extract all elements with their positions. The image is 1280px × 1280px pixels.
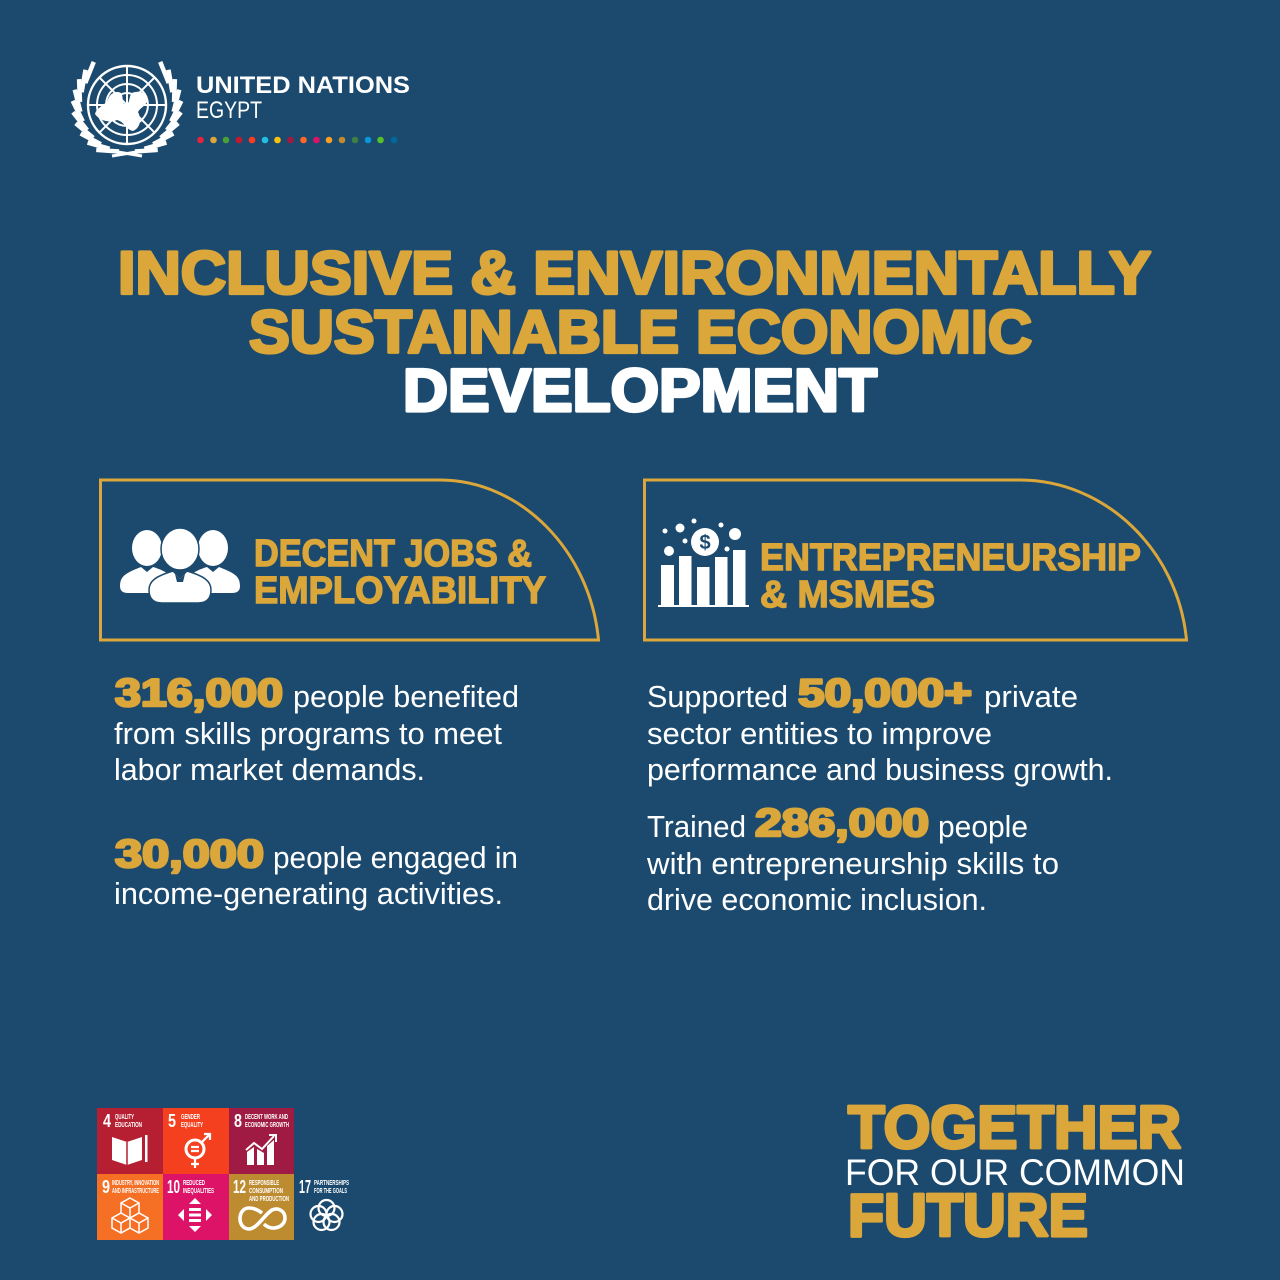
text block: entrepreneurship training stat: Trained [647,809,746,844]
title [118,240,1151,424]
tile: goal 10 reduced inequalities [163,1174,229,1240]
panel heading: ENTREPRENEURSHIP [760,537,1141,579]
tile: goal 4 quality education: QUALITY [115,1114,134,1121]
title: SUSTAINABLE ECONOMIC [249,298,1032,366]
tile: goal 4 quality education: EDUCATION [115,1122,142,1129]
text block: entrepreneurship training stat [646,802,1059,917]
panel heading: DECENT JOBS & [254,533,532,575]
tile: goal 8 decent work and economic growth: 8 [234,1111,242,1131]
text block: income-generating stat: income-generating activities. [114,876,503,911]
text block: skills programs stat: labor market demands. [114,752,425,787]
slogan: together for our common future: FUTURE [848,1182,1088,1249]
panel heading [760,537,1141,616]
label: goal 17 partnerships for the goals [299,1177,349,1230]
tile: goal 12 responsible consumption and production: RESPONSIBLE [249,1180,279,1187]
panel: decent jobs and employability [100,480,598,640]
text block: skills programs stat: 316,000 [115,672,283,715]
SDG goals grid [97,1108,349,1240]
country name: EGYPT [196,97,262,124]
panel heading: EMPLOYABILITY [254,570,546,612]
tile: goal 12 responsible consumption and production: AND PRODUCTION [249,1196,289,1203]
panel: entrepreneurship and MSMEs [644,480,1186,640]
tile: goal 10 reduced inequalities: 10 [167,1177,180,1197]
icon: three business people [120,528,240,603]
label: goal 17 partnerships for the goals: FOR THE GOALS [314,1188,347,1195]
logo: United Nations Egypt [71,62,410,159]
tile: goal 10 reduced inequalities: REDUCED [183,1180,205,1187]
panel outline [644,480,1186,640]
organisation name: UNITED NATIONS [196,72,410,99]
text block: private sector stat: sector entities to improve [647,716,992,751]
text block: income-generating stat: 30,000 [115,833,264,876]
slogan: together for our common future: FOR OUR COMMON [845,1152,1185,1193]
SDG colour dots [197,137,397,143]
text block: skills programs stat: people benefited [293,679,519,714]
tile: goal 8 decent work and economic growth: ECONOMIC GROWTH [245,1122,289,1129]
tile: goal 12 responsible consumption and production: CONSUMPTION [249,1188,283,1195]
tile: goal 9 industry, innovation and infrastructure: 9 [102,1177,110,1197]
tile: goal 5 gender equality: 5 [168,1111,176,1131]
icon: bar chart with dollar coin [658,518,749,607]
text block: income-generating stat [114,833,518,911]
tile: goal 9 industry, innovation and infrastructure [97,1174,163,1240]
tile: goal 9 industry, innovation and infrastructure: INDUSTRY, INNOVATION [112,1180,159,1187]
tile: goal 10 reduced inequalities: INEQUALITIES [183,1188,214,1195]
icon: UN emblem [71,62,183,159]
text block: private sector stat: 50,000+ [798,672,972,715]
slogan: together for our common future: TOGETHER [848,1094,1181,1161]
text block: entrepreneurship training stat: drive economic inclusion. [647,882,987,917]
tile: goal 4 quality education [97,1108,163,1174]
tile: goal 12 responsible consumption and production [229,1174,294,1240]
panel heading [254,533,546,612]
text block: skills programs stat: from skills programs to meet [114,716,502,751]
text block: private sector stat: performance and business growth. [647,752,1113,787]
label: goal 17 partnerships for the goals: PARTNERSHIPS [314,1180,349,1187]
tile: goal 8 decent work and economic growth [229,1108,294,1174]
text block: entrepreneurship training stat: 286,000 [755,802,929,845]
title: INCLUSIVE & ENVIRONMENTALLY [118,240,1151,306]
panel outline [100,480,598,640]
text block: private sector stat: Supported [647,679,788,714]
tile: goal 5 gender equality: GENDER [181,1114,200,1121]
text block: private sector stat: private [984,679,1078,714]
slogan: together for our common future [845,1094,1185,1249]
text block: skills programs stat [114,672,519,787]
icon: bar chart with dollar coin: $ [699,532,711,554]
text block: private sector stat [647,672,1113,787]
text block: entrepreneurship training stat: people [938,809,1028,844]
text block: entrepreneurship training stat: with entrepreneurship skills to [646,846,1059,881]
tile: goal 9 industry, innovation and infrastructure: AND INFRASTRUCTURE [112,1188,159,1195]
tile: goal 12 responsible consumption and production: 12 [233,1177,246,1197]
text block: income-generating stat: people engaged in [273,840,518,875]
panel heading: & MSMES [760,574,935,616]
tile: goal 4 quality education: 4 [103,1111,111,1131]
tile: goal 8 decent work and economic growth: DECENT WORK AND [245,1114,288,1121]
label: goal 17 partnerships for the goals: 17 [299,1177,311,1197]
tile: goal 5 gender equality [163,1108,229,1174]
title: DEVELOPMENT [403,357,877,424]
tile: goal 5 gender equality: EQUALITY [181,1122,203,1129]
